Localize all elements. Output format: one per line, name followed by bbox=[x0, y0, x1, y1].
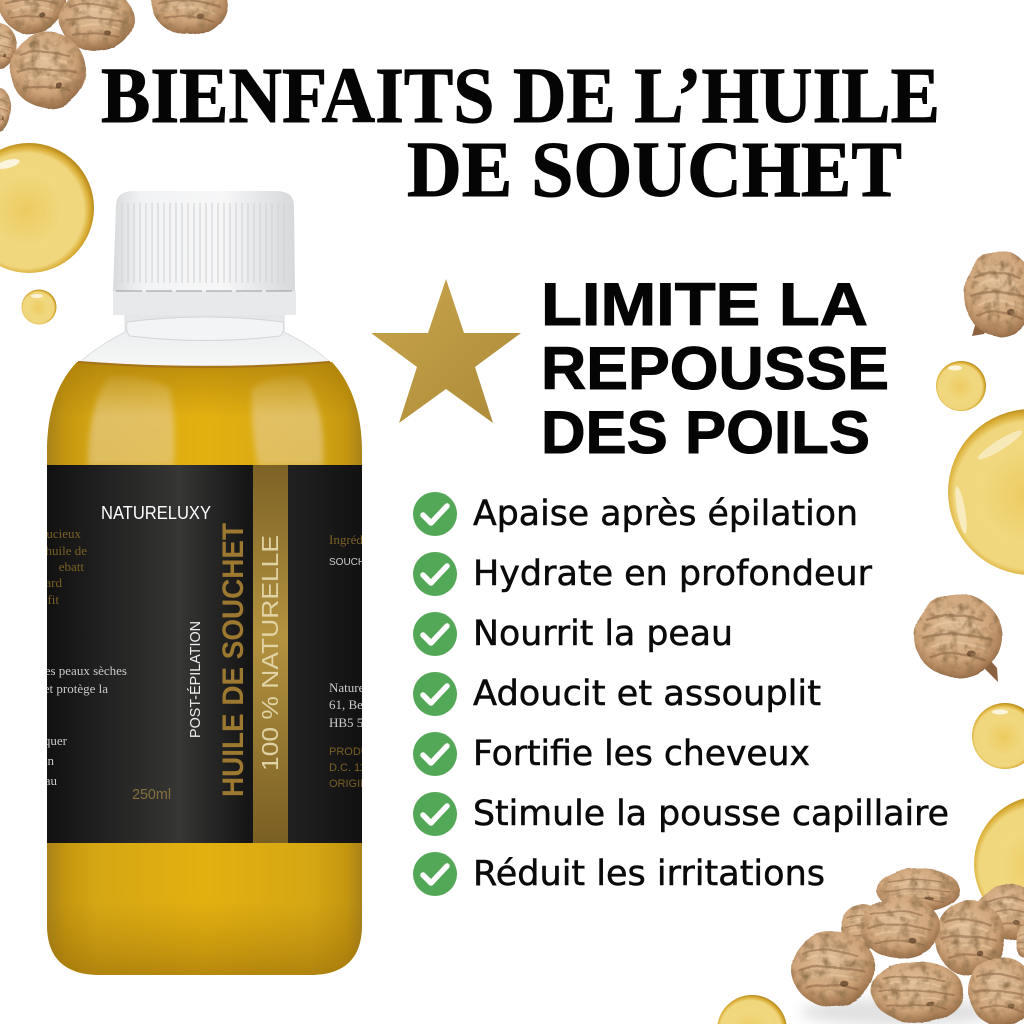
label small text left and right: SOUCHET bbox=[329, 557, 378, 568]
benefit 7: Réduit les irritations bbox=[473, 854, 825, 894]
oil drop: small left bbox=[22, 290, 56, 324]
label small text left and right: es et protège la bbox=[30, 681, 108, 696]
bottle label bbox=[47, 465, 362, 843]
oil drop: large top left bbox=[0, 143, 94, 273]
bottle neck and glass shoulder bbox=[76, 312, 334, 366]
label small text left and right: fit bbox=[47, 592, 59, 607]
label small text left and right: ORIGINE bbox=[329, 778, 375, 790]
liquid surface line bbox=[78, 362, 330, 367]
gold band bbox=[253, 465, 288, 843]
label small text left and right: HB5 5JT bbox=[329, 715, 376, 730]
volume: 250ml bbox=[132, 786, 171, 803]
bottom oil drop bbox=[717, 995, 787, 1024]
headline bbox=[541, 271, 889, 466]
benefit 1: Apaise après épilation bbox=[473, 494, 858, 534]
label small text left and right: un bbox=[41, 753, 54, 768]
headline: REPOUSSE bbox=[541, 335, 889, 402]
benefit 6: Stimule la pousse capillaire bbox=[473, 794, 949, 834]
label small text left and right: Ingrédients bbox=[329, 532, 387, 547]
right side tiger nut upper bbox=[964, 251, 1024, 337]
label small text left and right: 61, Belle bbox=[329, 697, 376, 712]
title bbox=[101, 53, 940, 214]
right side tiger nut middle bbox=[914, 594, 1002, 682]
liquid shading bbox=[47, 362, 362, 975]
benefit 4: Adoucit et assouplit bbox=[473, 674, 821, 714]
title: DE SOUCHET bbox=[407, 127, 902, 214]
brand name: NATURELUXY bbox=[101, 503, 211, 523]
bottle cap bbox=[113, 191, 296, 315]
right side oil drop small bbox=[936, 361, 986, 411]
label small text left and right: au bbox=[45, 773, 57, 788]
tiger nuts: bottom right cluster bbox=[791, 868, 1024, 1024]
label small text left and right: ourrit les peaux sèches bbox=[9, 663, 127, 678]
right side oil drop medium bbox=[972, 703, 1024, 769]
star icon bbox=[371, 279, 521, 423]
right side oil drop large bbox=[948, 409, 1024, 575]
label small text left and right: iquer bbox=[40, 733, 68, 748]
headline: DES POILS bbox=[541, 399, 870, 466]
benefit list bbox=[413, 492, 949, 896]
highlight left bbox=[88, 376, 174, 466]
highlight right bbox=[252, 376, 323, 466]
benefit 5: Fortifie les cheveux bbox=[473, 734, 810, 774]
label small text left and right: soucieux bbox=[35, 526, 81, 541]
headline: LIMITE LA bbox=[541, 271, 868, 338]
label small text left and right: PRODUIT bbox=[329, 746, 379, 758]
neck ring bbox=[126, 317, 284, 340]
title: BIENFAITS DE L’HUILE bbox=[101, 53, 940, 140]
post-epilation: POST-ÉPILATION bbox=[187, 621, 204, 738]
benefit 3: Nourrit la peau bbox=[473, 614, 733, 654]
label small text left and right: ebatt bbox=[59, 559, 84, 574]
label small text left and right: ard bbox=[45, 575, 62, 590]
label small text left and right: huile de bbox=[45, 543, 87, 558]
benefit 2: Hydrate en profondeur bbox=[473, 554, 873, 594]
product name: HUILE DE SOUCHET bbox=[217, 523, 250, 797]
right side oil drop lower bbox=[974, 796, 1024, 932]
label small text left and right: Natureluxy bbox=[329, 680, 388, 695]
product bottle bbox=[47, 191, 362, 975]
label small text left and right bbox=[47, 530, 362, 787]
100 percent natural: 100 % NATURELLE bbox=[257, 535, 283, 771]
tiger nuts: top left cluster bbox=[0, 0, 227, 132]
bottle liquid bbox=[47, 362, 362, 975]
label small text left and right: D.C. 11 bbox=[329, 762, 365, 774]
